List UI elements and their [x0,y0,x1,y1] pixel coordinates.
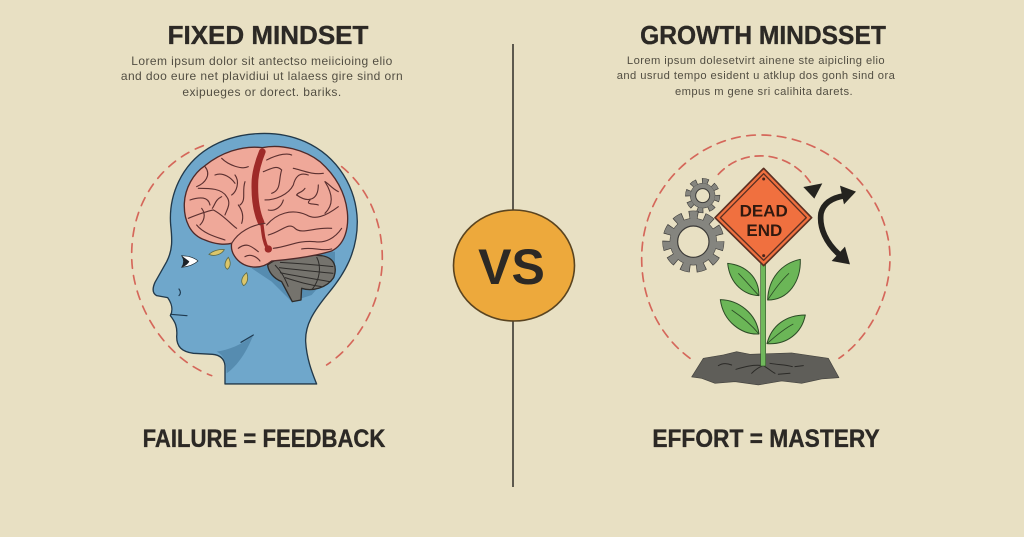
head silhouette [153,133,357,384]
inner dashed arc [718,156,812,184]
dead end sign: END [746,221,782,240]
text block: fixed mindset description [121,54,403,99]
dashed circle around head [132,146,382,376]
dead end sign: DEAD [740,201,788,220]
central fissure [255,152,272,253]
text block: growth mindset description [617,55,895,98]
text block: fixed mindset description: Lorem ipsum dolor sit antectso meiicioing elio [131,54,393,68]
brain [184,146,348,267]
caption: failure equals feedback: FAILURE = FEEDBACK [143,425,385,453]
soil mound [692,352,839,385]
dead end sign [715,168,812,266]
yellow droplets [209,249,248,286]
large gear [667,215,720,268]
brain folds [188,154,342,261]
neck and brain shadows [217,335,253,373]
stem [761,263,766,366]
cerebellum [268,255,335,302]
outer dashed circle [642,135,890,358]
leaves [720,259,805,344]
text block: growth mindset description: and usrud tempo esident u atklup dos gonh sind ora [617,70,895,82]
text block: growth mindset description: empus m gene sri calihita darets. [675,86,853,98]
text block: fixed mindset description: exipueges or dorect. bariks. [182,85,342,99]
curved double arrow [821,186,856,264]
heading: growth mindset: GROWTH MINDSSET [640,20,886,50]
nostril, mouth and jaw lines [171,289,253,342]
text block: fixed mindset description: and doo eure net plavidiui ut lalaess gire sind orn [121,69,403,83]
arrowhead on dashed arc [803,183,822,199]
text block: growth mindset description: Lorem ipsum dolesetvirt ainene ste aipicling elio [627,55,885,67]
badge: VS circle: VS [478,239,545,295]
heading: fixed mindset: FIXED MINDSET [168,20,368,50]
caption: effort equals mastery: EFFORT = MASTERY [652,425,880,453]
small gear [688,181,717,210]
eye [182,256,198,267]
